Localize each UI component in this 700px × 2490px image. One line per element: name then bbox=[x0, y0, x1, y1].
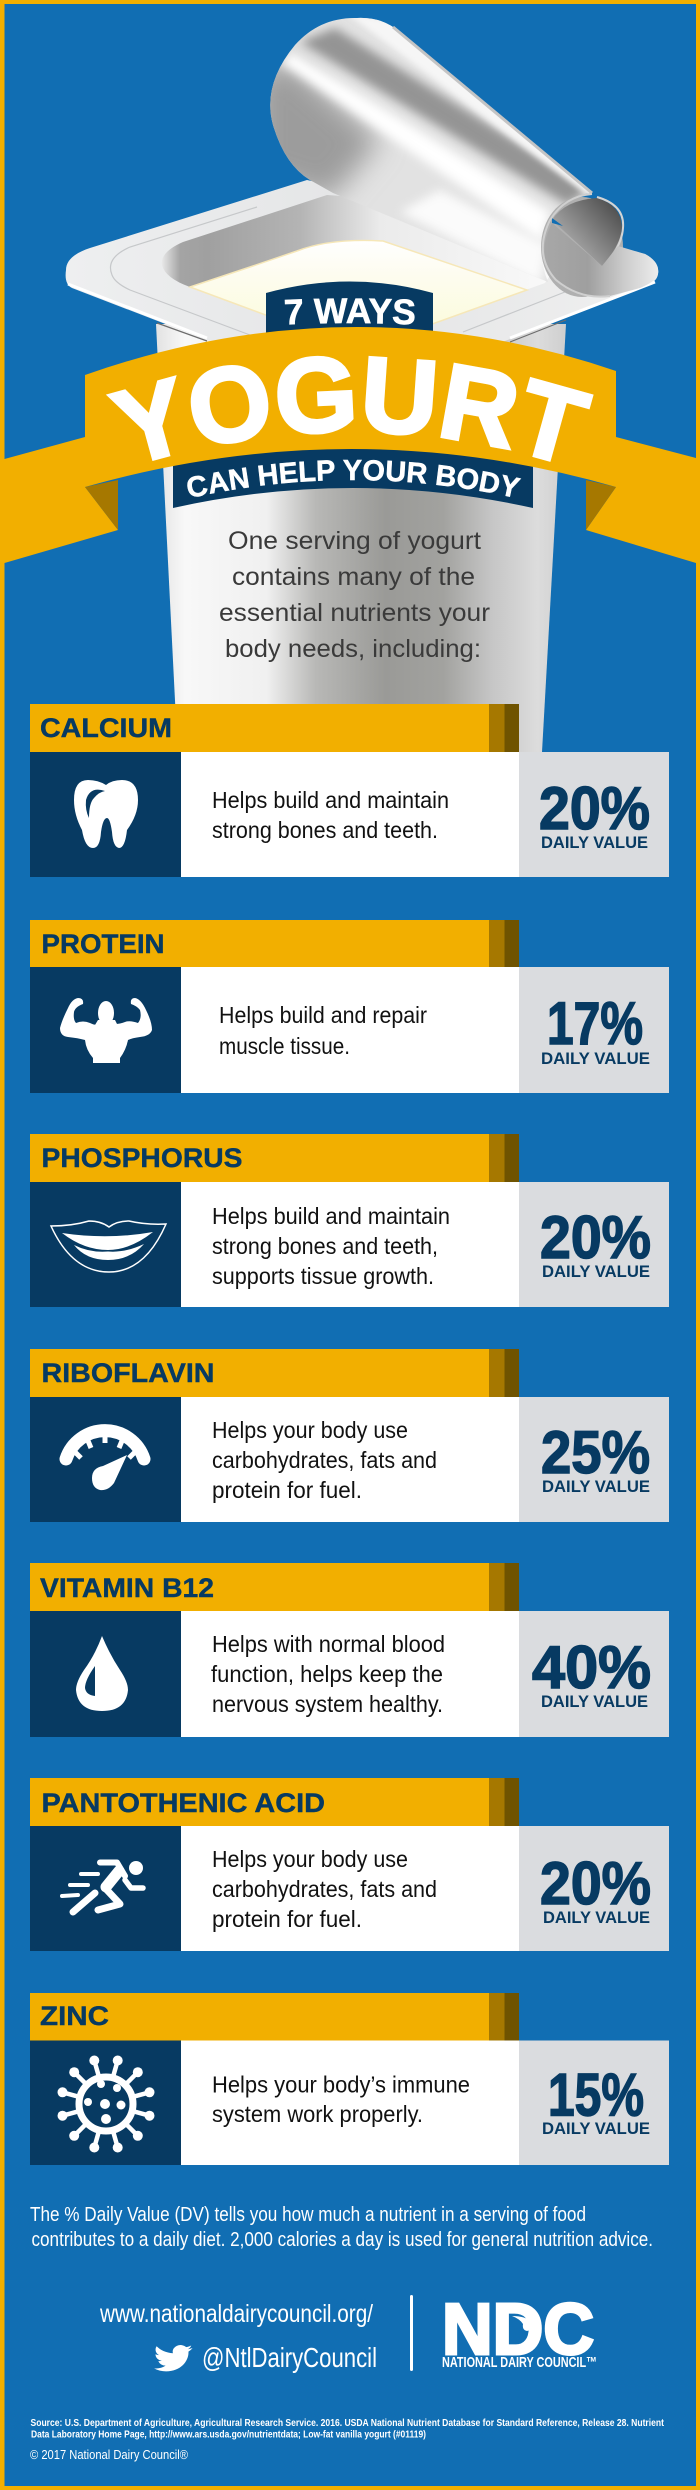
description bbox=[212, 787, 449, 843]
description: protein for fuel. bbox=[212, 1906, 362, 1932]
cup tray rim bbox=[66, 180, 658, 402]
daily value explanation: The % Daily Value (DV) tells you how much a nutrient in a serving of food bbox=[30, 2204, 586, 2226]
intro text: essential nutrients your bbox=[219, 599, 490, 627]
daily value explanation bbox=[30, 2204, 653, 2251]
daily value: 25%: DAILY VALUE bbox=[542, 1477, 650, 1496]
heading: zinc bbox=[30, 1993, 519, 2040]
panel: riboflavin bbox=[30, 1349, 669, 1522]
intro text: One serving of yogurt bbox=[228, 527, 481, 555]
description: supports tissue growth. bbox=[212, 1263, 434, 1289]
description: Helps your body’s immune bbox=[212, 2072, 470, 2098]
daily value: 20%: 20% bbox=[539, 775, 650, 842]
heading: calcium: CALCIUM bbox=[40, 713, 172, 743]
logo: national dairy council: NATIONAL DAIRY COUNCIL™ bbox=[442, 2355, 597, 2371]
panel: vitamin b12 bbox=[30, 1563, 669, 1737]
icon: twitter bird bbox=[154, 2345, 192, 2371]
logo: national dairy council: NDC bbox=[442, 2290, 594, 2370]
icon: smile bbox=[51, 1221, 166, 1272]
daily value: 17%: DAILY VALUE bbox=[541, 1049, 650, 1068]
intro text: contains many of the bbox=[232, 563, 475, 591]
heading: riboflavin: RIBOFLAVIN bbox=[42, 1358, 215, 1388]
heading: protein: PROTEIN bbox=[42, 929, 164, 959]
daily value: 15%: 15% bbox=[548, 2062, 644, 2128]
description: carbohydrates, fats and bbox=[212, 1876, 437, 1902]
description: Helps your body use bbox=[212, 1417, 408, 1443]
description: Helps with normal blood bbox=[212, 1631, 445, 1657]
description: system work properly. bbox=[212, 2101, 423, 2127]
card backgrounds bbox=[30, 1182, 669, 1307]
heading: vitamin b12: VITAMIN B12 bbox=[40, 1573, 214, 1603]
daily value: 15%: DAILY VALUE bbox=[542, 2119, 650, 2138]
description bbox=[212, 2072, 470, 2127]
tab: 7 ways: 7 WAYS bbox=[284, 298, 415, 325]
card backgrounds bbox=[30, 1611, 669, 1737]
daily value: 20%: 20% bbox=[540, 1850, 651, 1917]
description bbox=[211, 1631, 445, 1717]
description: Helps build and repair bbox=[219, 1002, 427, 1028]
icon: tooth bbox=[74, 780, 138, 848]
heading: vitamin b12 bbox=[30, 1563, 519, 1611]
icon: gauge bbox=[66, 1430, 144, 1490]
heading: phosphorus: PHOSPHORUS bbox=[42, 1143, 243, 1173]
card backgrounds bbox=[30, 967, 669, 1093]
daily value: 17%: 17% bbox=[547, 990, 643, 1057]
daily value: 20%: DAILY VALUE bbox=[541, 833, 648, 852]
heading: riboflavin bbox=[30, 1349, 519, 1397]
description: nervous system healthy. bbox=[212, 1691, 443, 1717]
description: Helps your body use bbox=[212, 1846, 408, 1872]
icon: virus bbox=[58, 2056, 154, 2152]
heading: calcium bbox=[30, 704, 519, 752]
card backgrounds bbox=[30, 752, 669, 877]
daily value: 20%: DAILY VALUE bbox=[543, 1908, 650, 1927]
description: Helps build and maintain bbox=[212, 1203, 450, 1229]
panel: zinc bbox=[30, 1993, 669, 2165]
description bbox=[212, 1417, 437, 1503]
tab: 7 ways bbox=[266, 282, 433, 332]
heading: protein bbox=[30, 920, 519, 967]
copyright: © 2017 National Dairy Council® bbox=[30, 2447, 188, 2462]
description: protein for fuel. bbox=[212, 1477, 362, 1503]
panel: calcium bbox=[30, 704, 669, 877]
cup body bbox=[156, 324, 566, 760]
description bbox=[212, 1203, 450, 1289]
panel: protein bbox=[30, 920, 669, 1093]
icon: drop bbox=[76, 1636, 128, 1711]
daily value: 40%: 40% bbox=[532, 1634, 651, 1701]
card backgrounds bbox=[30, 1397, 669, 1522]
card backgrounds bbox=[30, 1826, 669, 1951]
icon: muscle bbox=[60, 998, 152, 1063]
heading: pantothenic acid: PANTOTHENIC ACID bbox=[42, 1788, 325, 1818]
website link: www.nationaldairycouncil.org/ bbox=[99, 2300, 373, 2328]
description: strong bones and teeth. bbox=[212, 817, 438, 843]
panel: pantothenic acid bbox=[30, 1778, 669, 1951]
banner ribbon bbox=[4, 327, 696, 563]
illustration: yogurt cup bbox=[66, 0, 658, 760]
daily value: 25%: 25% bbox=[541, 1419, 650, 1486]
intro text bbox=[219, 527, 490, 663]
yogurt surface bbox=[190, 240, 527, 350]
description: Helps build and maintain bbox=[212, 787, 449, 813]
source note: Data Laboratory Home Page, http://www.ars.usda.gov/nutrientdata; Low-fat vanilla yogurt (#01119) bbox=[31, 2428, 426, 2440]
source note bbox=[30, 2417, 664, 2440]
description: function, helps keep the bbox=[211, 1661, 443, 1687]
description: strong bones and teeth, bbox=[212, 1233, 438, 1259]
title: yogurt: YOGURT bbox=[106, 356, 594, 462]
heading: zinc: ZINC bbox=[40, 2001, 109, 2031]
icon: runner bbox=[62, 1861, 143, 1912]
twitter handle: @NtlDairyCouncil bbox=[202, 2342, 377, 2373]
tab: can help your body background bbox=[173, 440, 533, 508]
intro text: body needs, including: bbox=[225, 635, 481, 663]
daily value: 40%: DAILY VALUE bbox=[541, 1692, 648, 1711]
panel: phosphorus bbox=[30, 1134, 669, 1307]
card backgrounds bbox=[30, 2040, 669, 2165]
daily value: 20%: 20% bbox=[540, 1204, 651, 1271]
heading: phosphorus bbox=[30, 1134, 519, 1182]
description bbox=[219, 1002, 427, 1059]
description: muscle tissue. bbox=[219, 1033, 350, 1059]
heading: pantothenic acid bbox=[30, 1778, 519, 1826]
description bbox=[212, 1846, 437, 1932]
daily value: 20%: DAILY VALUE bbox=[542, 1262, 650, 1281]
subtitle: can help your body: CAN HELP YOUR BODY bbox=[187, 460, 522, 497]
cup well bbox=[162, 195, 560, 350]
foil lid roll bbox=[270, 18, 658, 298]
description: carbohydrates, fats and bbox=[212, 1447, 437, 1473]
